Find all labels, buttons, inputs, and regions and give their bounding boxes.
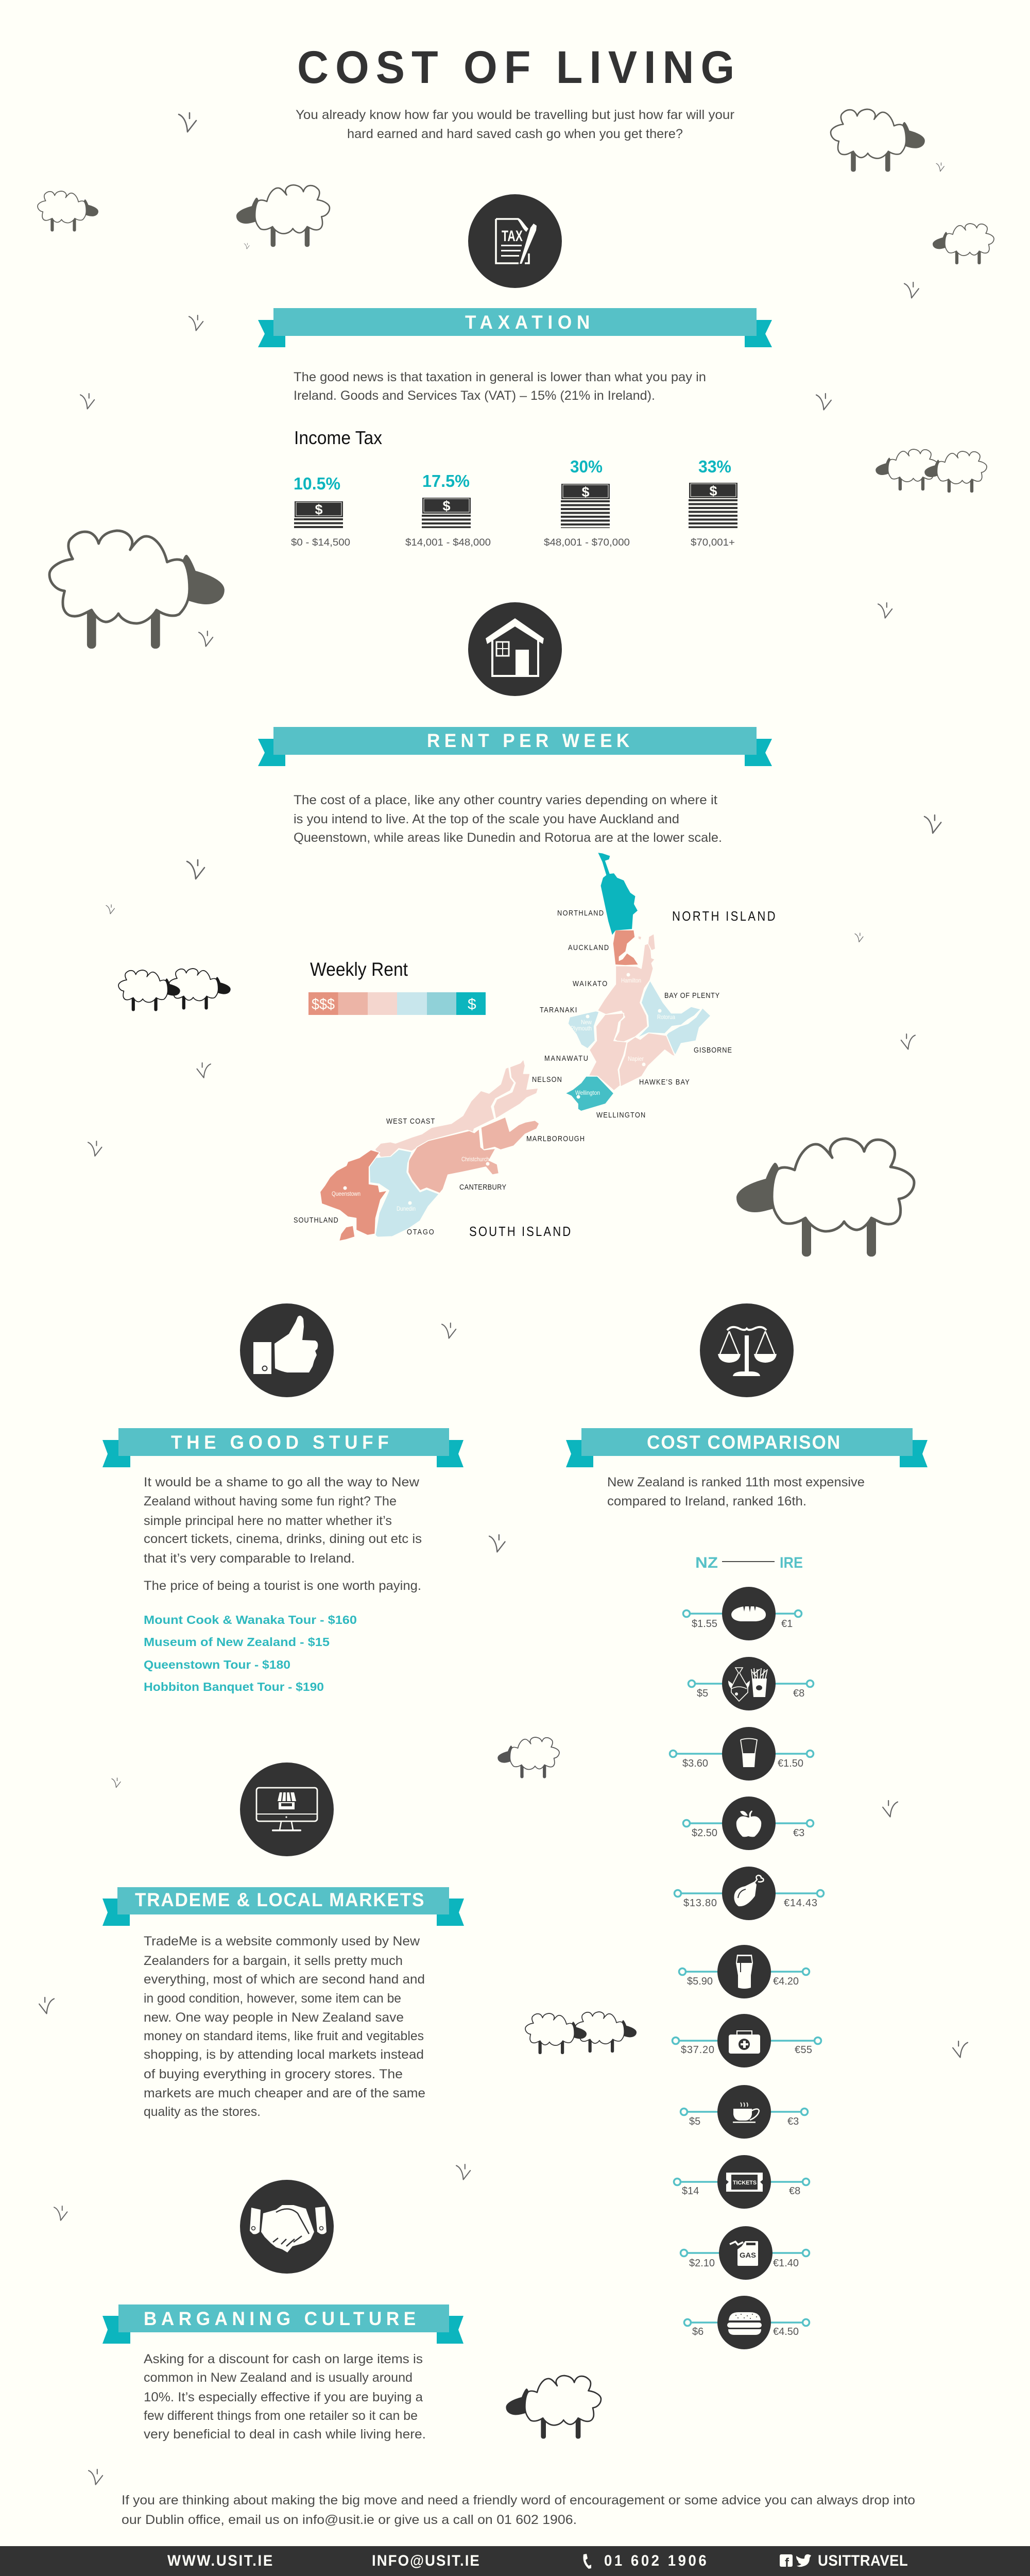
text: trademe body: Zealanders for a bargain, it sells pretty much	[144, 1954, 403, 1968]
region labels: GISBORNE	[694, 1045, 732, 1054]
footer bar: USITTRAVEL	[818, 2552, 908, 2569]
row: tickets: TICKETS	[733, 2180, 757, 2186]
region labels: WAIKATO	[573, 979, 607, 988]
text: good stuff body: Zealand without having some fun right? The	[144, 1494, 397, 1509]
city labels	[332, 977, 675, 1212]
row: pint: $5.90	[687, 1976, 713, 1987]
text: trademe body: everything, most of which are second hand and	[144, 1972, 425, 1987]
chart: tax band 17.5%: 17.5%	[422, 471, 470, 490]
region: manawatu	[589, 1013, 627, 1091]
region: gisborne	[665, 1008, 711, 1055]
row: pint	[679, 1945, 810, 1998]
city labels: Napier	[628, 1055, 644, 1062]
region: otago	[369, 1149, 439, 1237]
row: fish and chips: $5	[697, 1688, 708, 1699]
icon: phone	[583, 2554, 591, 2569]
banner: cost comparison: COST COMPARISON	[647, 1431, 840, 1453]
sheep: right pair first	[876, 449, 938, 490]
city markers	[343, 973, 661, 1205]
chart: tax band 10.5%: 10.5%	[294, 474, 340, 493]
chart: tax band 30%: $48,001 - $70,000	[544, 537, 630, 548]
banner: barganing culture	[102, 2304, 464, 2344]
banner: taxation	[258, 308, 772, 347]
chart: tax band 33%: $	[709, 483, 717, 499]
icon: tax document: TAX	[502, 228, 523, 245]
region: nelson	[493, 1059, 538, 1119]
row: bread: €1	[781, 1618, 793, 1630]
chart: tax band 17.5%	[405, 471, 491, 548]
sheep: left pair front	[118, 970, 180, 1011]
legend: nz vs ireland: IRE	[780, 1554, 803, 1571]
city labels: Queenstown	[332, 1190, 360, 1197]
row: apple: $2.50	[692, 1827, 717, 1839]
region: canterbury	[408, 1129, 499, 1193]
list: tour prices	[144, 1613, 357, 1693]
sheep: top right	[831, 109, 925, 172]
intro text: You already know how far you would be travelling but just how far will your	[296, 108, 734, 122]
region labels: HAWKE'S BAY	[639, 1077, 690, 1086]
sheep: right pair second	[924, 451, 987, 493]
legend: nz vs ireland: NZ	[695, 1554, 718, 1571]
row: bread	[683, 1587, 801, 1640]
chart: tax band 33%: $70,001+	[691, 537, 735, 548]
text: trademe body: of buying everything in grocery stores. The	[144, 2067, 403, 2081]
row: chicken	[675, 1867, 824, 1920]
banner: barganing culture: BARGANING CULTURE	[144, 2308, 416, 2329]
text: barganing body: Asking for a discount for cash on large items is	[144, 2352, 423, 2366]
region labels: MANAWATU	[544, 1054, 588, 1062]
text: ranking: compared to Ireland, ranked 16th.	[607, 1494, 806, 1509]
text: good stuff body: that it’s very comparable to Ireland.	[144, 1551, 355, 1566]
row: medical kit	[673, 2014, 821, 2067]
region: west coast	[375, 1067, 514, 1157]
heading: income tax: Income Tax	[294, 427, 382, 448]
banner: taxation: TAXATION	[465, 311, 590, 333]
sheep: top left small	[38, 191, 98, 231]
row: apple: €3	[793, 1827, 804, 1839]
row: apple	[683, 1797, 814, 1850]
region labels: WELLINGTON	[596, 1110, 645, 1119]
map: new zealand regions	[294, 853, 776, 1241]
text: good stuff body: concert tickets, cinema, drinks, dining out etc is	[144, 1532, 422, 1546]
list: tour prices: Museum of New Zealand - $15	[144, 1635, 330, 1649]
region labels: WEST COAST	[386, 1116, 435, 1125]
sheep: big left	[49, 531, 225, 649]
icon: house	[468, 602, 562, 696]
legend: weekly rent: $$$	[312, 996, 335, 1013]
panel: trademe and local markets	[102, 1762, 464, 2119]
panel: the good stuff	[102, 1303, 464, 1693]
row: gas: $2.10	[689, 2258, 715, 2269]
region labels: NELSON	[532, 1075, 562, 1083]
banner: cost comparison	[566, 1428, 928, 1467]
text: trademe body: markets are much cheaper and are of the same	[144, 2086, 425, 2100]
row: gas	[681, 2226, 810, 2280]
row: burger: $6	[692, 2326, 703, 2337]
city labels: Plymouth	[571, 1025, 592, 1032]
text: good stuff body	[144, 1475, 422, 1593]
region: waikato	[597, 943, 655, 1043]
text: closing note: If you are thinking about making the big move and need a friendly word of encouragement or some advice you can always drop into	[122, 2493, 915, 2507]
text: trademe body: quality as the stores.	[144, 2105, 261, 2119]
region labels	[294, 908, 776, 1239]
text: ranking: New Zealand is ranked 11th most expensive	[607, 1475, 865, 1489]
text: barganing body: few different things from one retailer so it can be	[144, 2409, 418, 2423]
icon: tax document	[468, 194, 562, 288]
text: vat: Ireland. Goods and Services Tax (VAT) – 15% (21% in Ireland).	[294, 388, 655, 403]
text: barganing body: very beneficial to deal in cash while living here.	[144, 2427, 426, 2442]
row: coffee	[681, 2085, 808, 2139]
sheep: centre pair rear	[575, 2012, 637, 2053]
row: tickets	[674, 2155, 810, 2209]
icon: scales	[700, 1303, 794, 1397]
city labels: Wellington	[575, 1089, 600, 1096]
row: chicken: $13.80	[683, 1897, 717, 1909]
text: vat: The good news is that taxation in general is lower than what you pay in	[294, 370, 706, 384]
text: trademe body: shopping, is by attending local markets instead	[144, 2047, 424, 2062]
chart: tax band 30%	[544, 457, 630, 548]
banner: rent per week: RENT PER WEEK	[427, 730, 629, 751]
region labels: MARLBOROUGH	[526, 1134, 585, 1143]
row: fish and chips	[688, 1657, 814, 1710]
intro text	[296, 108, 734, 141]
icon: handshake	[240, 2180, 334, 2274]
text: closing note	[122, 2493, 915, 2527]
footer bar	[0, 2546, 1030, 2576]
region labels: NORTH ISLAND	[672, 909, 776, 924]
region: taranaki	[568, 1011, 599, 1048]
legend: nz vs ireland	[695, 1554, 803, 1571]
text: barganing body	[144, 2352, 426, 2442]
text: rent intro: Queenstown, while areas like Dunedin and Rotorua are at the lower scale.	[294, 831, 722, 845]
region labels: NORTHLAND	[557, 908, 604, 917]
row: burger: €4.50	[773, 2326, 799, 2337]
list: tour prices: Mount Cook & Wanaka Tour - $160	[144, 1613, 357, 1626]
region: bay of plenty	[637, 980, 701, 1038]
footer bar: WWW.USIT.IE	[167, 2552, 272, 2569]
region labels: SOUTHLAND	[294, 1215, 338, 1224]
region labels: BAY OF PLENTY	[664, 991, 719, 999]
region: stewart island	[339, 1226, 354, 1241]
chart: tax band 33%	[689, 457, 737, 548]
chart: tax band 30%: 30%	[570, 457, 603, 476]
sheep: left pair rear	[169, 969, 231, 1009]
chart: tax band 10.5%: $0 - $14,500	[291, 537, 350, 548]
city labels: Hamilton	[621, 977, 641, 984]
sheep: bottom	[506, 2376, 601, 2439]
icon: monitor shop	[240, 1762, 334, 1856]
region: marlborough	[481, 1117, 539, 1150]
city labels: Dunedin	[397, 1205, 416, 1212]
sheep: centre pair front	[525, 2013, 587, 2054]
row: coffee: €3	[787, 2116, 799, 2127]
title: COST OF LIVING	[297, 42, 734, 93]
legend: weekly rent: $	[468, 996, 476, 1013]
row: medical kit: €55	[795, 2044, 812, 2056]
text: barganing body: 10%. It’s especially effective if you are buying a	[144, 2390, 423, 2404]
list: tour prices: Hobbiton Banquet Tour - $190	[144, 1680, 324, 1693]
panel: rent per week	[258, 602, 776, 1241]
row: glass: €1.50	[778, 1758, 803, 1769]
region labels: TARANAKI	[540, 1005, 577, 1014]
row: chicken: €14.43	[784, 1897, 817, 1909]
chart: tax band 10.5%: $	[315, 502, 323, 517]
banner: the good stuff	[102, 1428, 464, 1467]
text: rent intro: The cost of a place, like any other country varies depending on where it	[294, 793, 717, 807]
row: gas: GAS	[740, 2251, 756, 2259]
icon: facebook: f	[785, 2556, 789, 2570]
sheep: big right	[736, 1139, 914, 1257]
text: rent intro: is you intend to live. At the top of the scale you have Auckland and	[294, 812, 679, 826]
row: pint: €4.20	[773, 1976, 799, 1987]
chart: tax band 17.5%: $	[442, 498, 451, 514]
legend: weekly rent	[308, 959, 486, 1015]
region labels: AUCKLAND	[568, 943, 609, 952]
banner: rent per week	[258, 727, 772, 766]
icon: thumbs up	[240, 1303, 334, 1397]
text: trademe body	[144, 1934, 425, 2119]
banner: trademe and local markets: TRADEME & LOCAL MARKETS	[135, 1889, 424, 1910]
text: good stuff body: simple principal here no matter whether it’s	[144, 1514, 392, 1528]
panel: cost comparison	[566, 1303, 928, 2349]
text: trademe body: TradeMe is a website commonly used by New	[144, 1934, 420, 1948]
row: gas: €1.40	[773, 2258, 799, 2269]
sheep: centre facing left	[497, 1737, 559, 1778]
row: glass	[670, 1727, 814, 1781]
text: trademe body: money on standard items, like fruit and vegitables	[144, 2029, 424, 2043]
panel: taxation	[258, 194, 772, 548]
banner: the good stuff: THE GOOD STUFF	[171, 1431, 389, 1453]
row: coffee: $5	[689, 2116, 700, 2127]
sheep: facing left near tax icon	[236, 185, 330, 247]
text: good stuff body: It would be a shame to go all the way to New	[144, 1475, 420, 1489]
text: good stuff body: The price of being a tourist is one worth paying.	[144, 1579, 421, 1593]
icon: facebook	[780, 2554, 793, 2570]
city labels: Christchurch	[461, 1156, 489, 1163]
footer bar: 01 602 1906	[604, 2552, 707, 2569]
row: burger	[684, 2296, 810, 2349]
text: trademe body: in good condition, however, some item can be	[144, 1991, 401, 2006]
region labels: OTAGO	[407, 1227, 434, 1236]
text: vat	[294, 370, 706, 403]
chart: tax band 30%: $	[581, 484, 590, 500]
legend: weekly rent: Weekly Rent	[310, 959, 408, 980]
banner: trademe and local markets	[102, 1887, 464, 1926]
icon: twitter	[796, 2554, 811, 2567]
row: glass: $3.60	[682, 1758, 708, 1769]
region: hawkes bay	[619, 1033, 675, 1087]
row: bread: $1.55	[692, 1618, 717, 1630]
intro text: hard earned and hard saved cash go when you get there?	[347, 127, 683, 141]
row: medical kit: $37.20	[681, 2044, 714, 2056]
row: fish and chips: €8	[793, 1688, 804, 1699]
region: coromandel islands	[639, 934, 655, 950]
text: closing note: our Dublin office, email us on info@usit.ie or give us a call on 01 602 1906.	[122, 2513, 577, 2527]
region: northland	[598, 853, 638, 935]
chart: tax band 10.5%	[291, 474, 350, 548]
panel: barganing culture	[102, 2180, 464, 2442]
chart: tax band 33%: 33%	[698, 457, 731, 476]
text: rent intro	[294, 793, 722, 845]
region: wellington	[565, 1076, 614, 1111]
region: auckland	[613, 930, 638, 965]
region labels: SOUTH ISLAND	[469, 1224, 571, 1239]
city labels: New	[581, 1019, 592, 1026]
sheep: right small	[933, 224, 994, 264]
text: ranking	[607, 1475, 865, 1509]
chart: tax band 17.5%: $14,001 - $48,000	[405, 537, 491, 548]
text: trademe body: new. One way people in New Zealand save	[144, 2010, 404, 2025]
row: tickets: $14	[682, 2185, 699, 2197]
region: southland	[320, 1150, 387, 1235]
city labels: Rotorua	[657, 1013, 675, 1021]
text: barganing body: common in New Zealand and is usually around	[144, 2370, 413, 2385]
list: tour prices: Queenstown Tour - $180	[144, 1658, 290, 1671]
region labels: CANTERBURY	[459, 1182, 506, 1191]
row: tickets: €8	[789, 2185, 800, 2197]
footer bar: INFO@USIT.IE	[372, 2552, 479, 2569]
